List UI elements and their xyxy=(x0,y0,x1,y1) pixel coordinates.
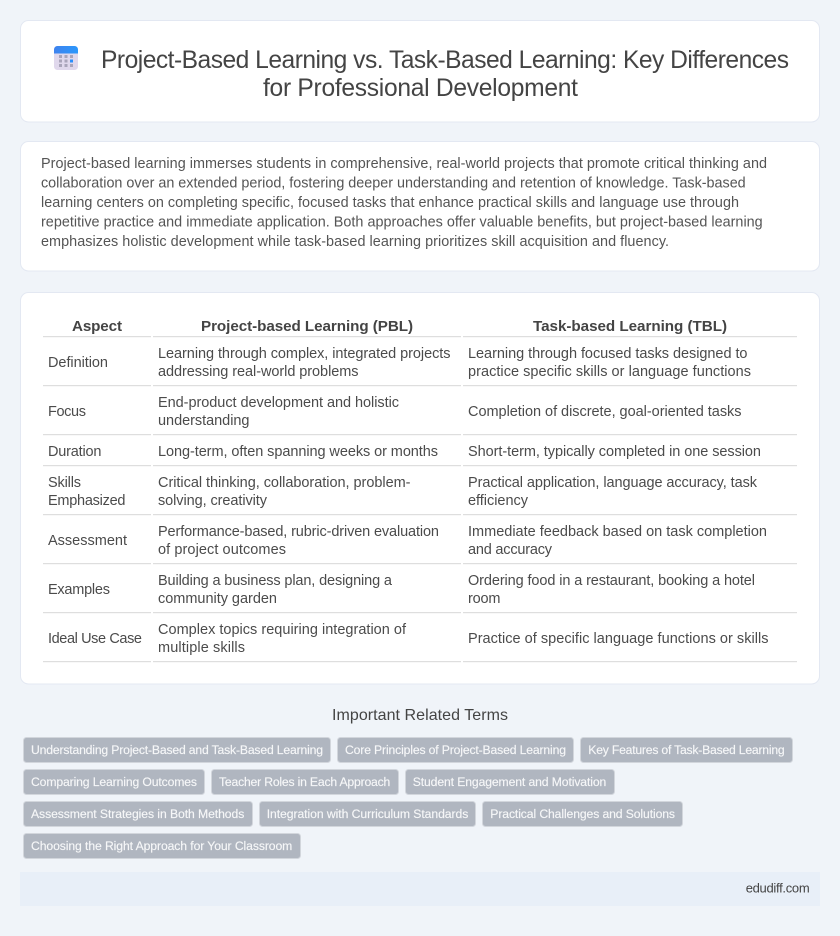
panel: introduction text: learning centers on completing specific, focused tasks that enhance practical skills and language use through xyxy=(41,195,739,211)
row: definition: Learning through complex, integrated projects xyxy=(158,346,450,362)
title xyxy=(101,47,789,102)
table header: Task-based Learning (TBL) xyxy=(533,318,727,335)
row: examples xyxy=(48,573,755,607)
row: definition: Definition xyxy=(48,355,108,371)
row: skills emphasized: solving, creativity xyxy=(158,493,268,509)
title: for Professional Development xyxy=(263,75,578,102)
related term tags: Core Principles of Project-Based Learning xyxy=(345,743,566,757)
row: duration: Long-term, often spanning weeks or months xyxy=(158,444,438,460)
row: skills emphasized: efficiency xyxy=(468,493,529,509)
row: assessment: Immediate feedback based on task completion xyxy=(468,524,767,540)
panel: introduction text: collaboration over an extended period, fostering deeper understanding and retention of knowledge. Task-based xyxy=(41,176,746,192)
row: definition: addressing real-world problems xyxy=(158,364,358,380)
row: skills emphasized xyxy=(48,475,758,509)
table header xyxy=(72,318,727,335)
footer xyxy=(20,872,820,906)
title: Project-Based Learning vs. Task-Based Learning: Key Differences xyxy=(101,47,789,74)
related term tags xyxy=(24,738,792,858)
row: skills emphasized: Practical application, language accuracy, task xyxy=(468,475,758,491)
related term tags: Understanding Project-Based and Task-Based Learning xyxy=(31,743,323,757)
row: focus: Completion of discrete, goal-oriented tasks xyxy=(468,404,742,420)
row: duration: Short-term, typically completed in one session xyxy=(468,444,761,460)
row: examples: Examples xyxy=(48,582,110,598)
related term tags: Teacher Roles in Each Approach xyxy=(219,775,390,789)
related term tags: Assessment Strategies in Both Methods xyxy=(31,807,244,821)
row: definition: practice specific skills or language functions xyxy=(468,364,751,380)
row: skills emphasized: Skills xyxy=(48,475,81,491)
row: assessment xyxy=(48,524,767,558)
row: examples: Ordering food in a restaurant, booking a hotel xyxy=(468,573,755,589)
row: focus: understanding xyxy=(158,413,250,429)
row: assessment: of project outcomes xyxy=(158,542,286,558)
row: skills emphasized: Emphasized xyxy=(48,493,126,509)
related term tags: Key Features of Task-Based Learning xyxy=(588,743,785,757)
footer: edudiff.com xyxy=(746,881,810,896)
row: ideal use case xyxy=(48,622,768,656)
related term tags: Integration with Curriculum Standards xyxy=(267,807,468,821)
row: assessment: Assessment xyxy=(48,533,127,549)
row: ideal use case: Ideal Use Case xyxy=(48,631,142,647)
row: ideal use case: Complex topics requiring integration of xyxy=(158,622,407,638)
panel: introduction text: Project-based learning immerses students in comprehensive, real-world projects that promote critical thinking and xyxy=(41,156,767,172)
row: focus: Focus xyxy=(48,404,86,420)
row: skills emphasized: Critical thinking, collaboration, problem- xyxy=(158,475,411,491)
row: assessment: Performance-based, rubric-driven evaluation xyxy=(158,524,439,540)
row: definition: Learning through focused tasks designed to xyxy=(468,346,748,362)
table header: Aspect xyxy=(72,318,122,335)
panel: introduction text: emphasizes holistic development while task-based learning prioritizes skill acquisition and fluency. xyxy=(41,234,669,250)
heading: related terms: Important Related Terms xyxy=(332,707,508,724)
related term tags: Practical Challenges and Solutions xyxy=(490,807,675,821)
panel: introduction text xyxy=(20,142,820,271)
panel: header xyxy=(20,20,820,122)
table header: Project-based Learning (PBL) xyxy=(201,318,413,335)
row: examples: community garden xyxy=(158,591,277,607)
panel: comparison table xyxy=(20,292,820,684)
row: duration xyxy=(48,444,761,460)
icon: calendar xyxy=(54,46,78,70)
row: focus xyxy=(48,395,742,429)
row: examples: Building a business plan, designing a xyxy=(158,573,393,589)
row: examples: room xyxy=(468,591,500,607)
panel: introduction text: repetitive practice and immediate application. Both approaches offer valuable benefits, but project-based learning xyxy=(41,214,763,230)
row: ideal use case: Practice of specific language functions or skills xyxy=(468,631,768,647)
row: focus: End-product development and holistic xyxy=(158,395,399,411)
row: duration: Duration xyxy=(48,444,102,460)
row: assessment: and accuracy xyxy=(468,542,553,558)
related term tags: Choosing the Right Approach for Your Classroom xyxy=(31,839,292,853)
related term tags: Student Engagement and Motivation xyxy=(413,775,606,789)
row: definition xyxy=(48,346,751,380)
related term tags: Comparing Learning Outcomes xyxy=(31,775,197,789)
row: ideal use case: multiple skills xyxy=(158,640,245,656)
